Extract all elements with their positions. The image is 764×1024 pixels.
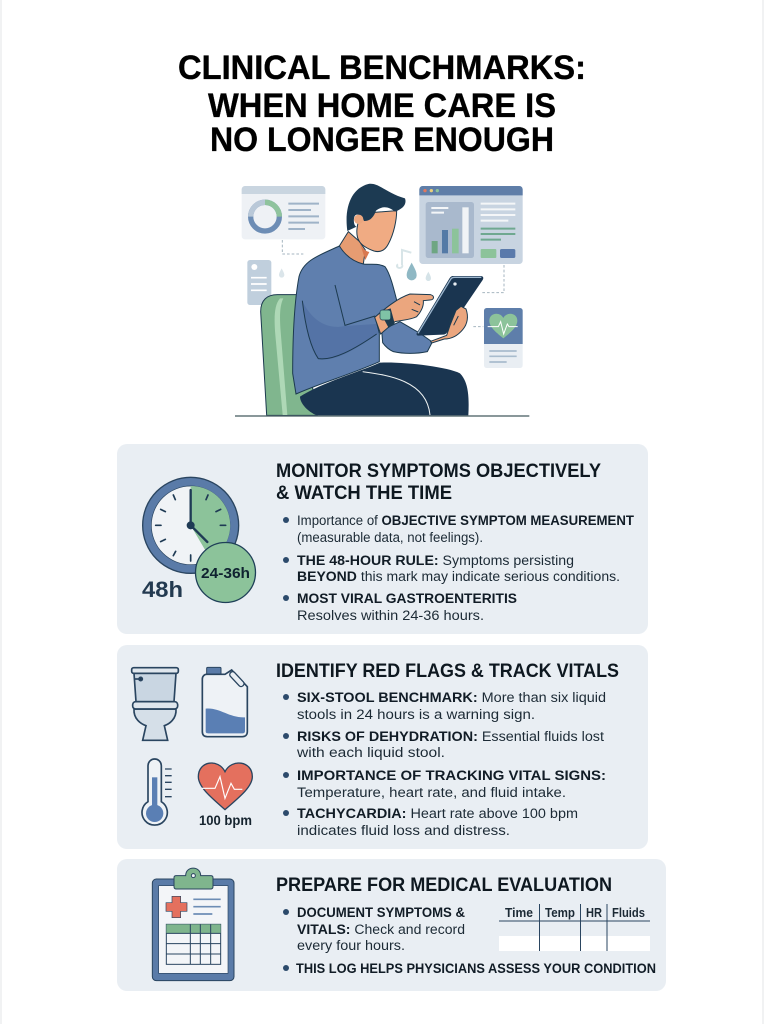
holding hand xyxy=(431,306,467,343)
hair xyxy=(347,184,406,231)
heading xyxy=(276,461,601,504)
bullet: 48-hour rule xyxy=(283,553,620,584)
trousers xyxy=(300,363,469,415)
bullet: document symptoms xyxy=(283,905,465,953)
dashboard window xyxy=(419,186,523,264)
far arm sleeve xyxy=(382,322,432,353)
bullet: tachycardia: indicates fluid loss and distress. xyxy=(297,823,510,838)
heading: PREPARE FOR MEDICAL EVALUATION xyxy=(276,875,612,896)
water drops xyxy=(279,250,431,281)
heading: & WATCH THE TIME xyxy=(276,483,452,504)
bullet: objective measurement: (measurable data, not feelings). xyxy=(297,530,483,545)
title xyxy=(178,49,586,159)
bullet: dehydration: RISKS OF DEHYDRATION: Essential fluids lost xyxy=(297,729,604,744)
log table xyxy=(499,904,650,951)
label: 100 bpm: 100 bpm xyxy=(199,813,252,828)
log table: Fluids xyxy=(612,906,645,920)
bullet: objective measurement: Importance of OBJECTIVE SYMPTOM MEASUREMENT xyxy=(297,513,635,528)
bullet: six-stool benchmark xyxy=(283,690,606,722)
bullet: 48-hour rule: BEYOND this mark may indicate serious conditions. xyxy=(297,569,620,584)
bullet: document symptoms: DOCUMENT SYMPTOMS & xyxy=(297,905,465,920)
person xyxy=(293,184,483,415)
panel: red flags xyxy=(117,645,648,849)
bullet: dehydration xyxy=(283,729,604,760)
log table: Temp xyxy=(545,906,575,920)
bullet: viral gastroenteritis: MOST VIRAL GASTROENTERITIS xyxy=(297,591,517,606)
bullet: viral gastroenteritis xyxy=(283,591,517,623)
bullet: tachycardia: TACHYCARDIA: Heart rate above 100 bpm xyxy=(297,806,578,821)
title: NO LONGER ENOUGH xyxy=(210,121,554,159)
bullet: document symptoms: VITALS: Check and record xyxy=(297,922,465,937)
neck xyxy=(339,232,365,264)
bullet: vital signs: IMPORTANCE OF TRACKING VITAL SIGNS: xyxy=(297,768,606,783)
label: 48h: 48h xyxy=(142,577,183,602)
bullet: document symptoms: every four hours. xyxy=(297,938,405,953)
illustration: person reading health data on a tablet xyxy=(235,184,529,417)
log table: HR xyxy=(586,906,602,920)
bullet: vital signs xyxy=(283,768,606,800)
bullet: vital signs: Temperature, heart rate, and fluid intake. xyxy=(297,785,566,800)
title: CLINICAL BENCHMARKS: xyxy=(178,49,586,87)
bullet: six-stool benchmark: stools in 24 hours is a warning sign. xyxy=(297,707,535,722)
bullet: dehydration: with each liquid stool. xyxy=(296,745,445,760)
sweater xyxy=(293,246,398,394)
bullet: viral gastroenteritis: Resolves within 24-36 hours. xyxy=(297,608,484,623)
bullet: physician log: THIS LOG HELPS PHYSICIANS ASSESS YOUR CONDITION xyxy=(296,961,656,976)
donut chart card xyxy=(242,186,325,239)
panel: medical evaluation xyxy=(117,859,666,991)
tablet xyxy=(417,276,483,336)
heading: MONITOR SYMPTOMS OBJECTIVELY xyxy=(276,461,601,482)
bullet: objective measurement xyxy=(283,513,635,545)
heart monitor card xyxy=(484,308,523,368)
bullet: tachycardia xyxy=(283,806,578,838)
icon: clock xyxy=(143,477,239,573)
icon: thermometer xyxy=(142,759,172,825)
bullet: 48-hour rule: THE 48-HOUR RULE: Symptoms persisting xyxy=(297,553,574,568)
icon: clipboard xyxy=(152,868,234,981)
smart watch xyxy=(380,308,395,328)
title: WHEN HOME CARE IS xyxy=(208,87,556,125)
badge: 24-36h xyxy=(196,542,256,602)
bullet: six-stool benchmark: SIX-STOOL BENCHMARK: More than six liquid xyxy=(297,690,606,705)
panel: monitor symptoms xyxy=(117,444,648,634)
badge: 24-36h: 24-36h xyxy=(201,565,250,582)
small document card xyxy=(247,260,271,305)
icon: toilet xyxy=(132,668,178,740)
icon: fluid jug xyxy=(202,667,247,737)
heading: IDENTIFY RED FLAGS & TRACK VITALS xyxy=(276,661,619,682)
chair xyxy=(261,295,317,415)
log table: Time xyxy=(505,906,533,920)
head xyxy=(357,211,397,252)
icon: heart rate xyxy=(198,763,252,810)
arm and pointing hand xyxy=(375,294,433,334)
